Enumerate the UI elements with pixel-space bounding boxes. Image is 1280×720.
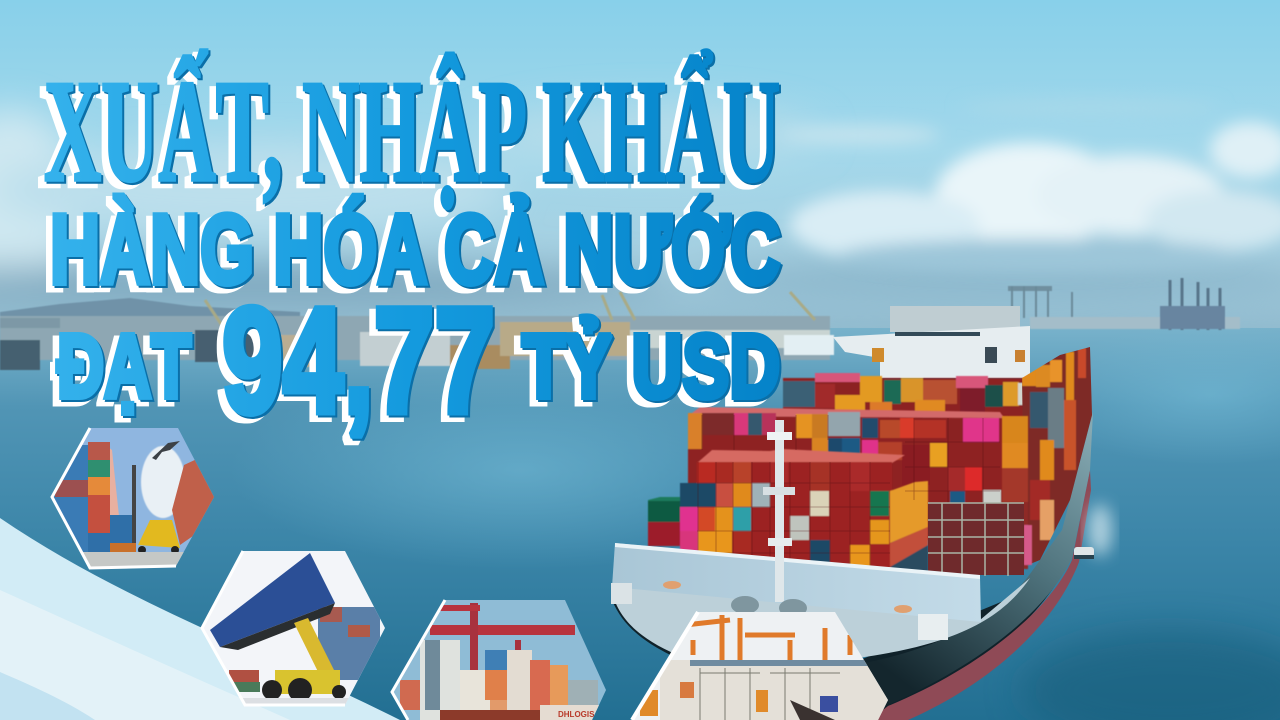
ship: red waterline stripe [870,470,1091,720]
ship: superstructure [833,306,1030,378]
title line 3: unit: TỶ USD [522,316,780,417]
ship: foredeck [612,578,1030,668]
photo hexagon 4: white container yard [630,610,890,720]
title [44,49,780,444]
background: sea [0,325,1280,720]
ship: far orange stack [1002,416,1032,569]
photo hexagon 2: reach stacker [200,549,390,709]
ship: container grid lines [697,415,1000,570]
ship: lashing scaffold [928,503,1024,576]
ship: mast [763,420,795,602]
ship: breakwater wall [612,543,981,622]
background: sky [0,0,1280,335]
title line 2: HÀNG HÓA CẢ NƯỚC [50,194,780,304]
photo hexagon 3: port cranes and stacks: DHLOGIS [558,710,595,719]
container ship [611,306,1112,720]
ship: dark hull [612,560,1070,720]
hexagon 1 white edge [52,428,176,568]
ship: far right narrowing stack [1020,345,1095,570]
hexagon 3 white edge [392,600,445,720]
title line 3: figure: 94,77 [222,276,495,444]
ship: hull side [860,412,1093,704]
hexagon 4 white edge [632,612,698,720]
hexagon 2 white edge [202,551,345,705]
decorative light curve bottom-left [0,518,400,720]
ship: deck fittings [611,581,948,640]
small boat and wake [1074,504,1112,559]
ship: containers, rear rows [783,373,1030,438]
photo hexagon 3: port cranes and stacks [390,598,610,720]
background: port skyline [0,278,1240,370]
photo hexagon 1: containers and plane [50,426,220,572]
title line 3: label: ĐẠT [57,317,191,417]
ship: containers, front block [648,449,928,578]
ship: containers, middle block [688,407,1008,540]
